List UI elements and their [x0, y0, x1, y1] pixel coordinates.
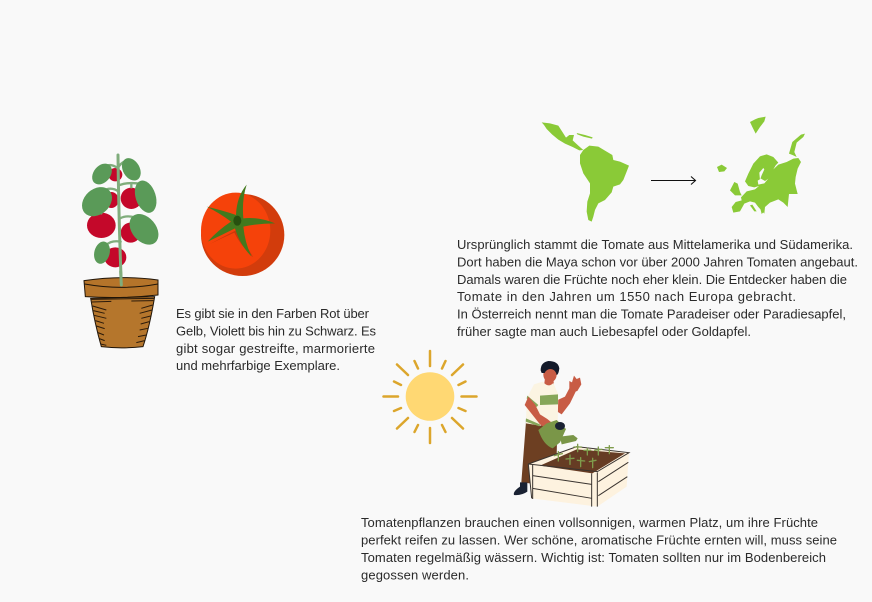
text: origin: In Österreich nennt man die Tomate Paradeiser oder Paradiesapfel, — [457, 307, 846, 322]
watering can — [538, 420, 578, 448]
raised arm — [557, 388, 576, 414]
text: care: Tomaten regelmäßig wässern. Wichtig ist: Tomaten sollten nur im Bodenbereich — [361, 550, 826, 565]
text: origin: Damals waren die Früchte noch eher klein. Die Entdecker haben die — [457, 272, 847, 287]
illustration: gardener watering a raised bed — [514, 361, 629, 507]
hand — [569, 376, 581, 392]
text: colours: Es gibt sie in den Farben Rot über — [176, 306, 370, 321]
raised bed — [528, 447, 629, 507]
shirt — [526, 382, 558, 426]
icon: tomato plant in pot — [76, 155, 164, 348]
neck — [544, 378, 554, 389]
text: origin: Tomate in den Jahren um 1550 nach Europa gebracht. — [457, 289, 796, 304]
lowered arm — [525, 397, 553, 429]
bed planks — [528, 447, 629, 507]
text: colours: und mehrfarbige Exemplare. — [176, 358, 340, 373]
map: Latin America — [542, 122, 629, 222]
arrow — [651, 176, 696, 184]
soil — [540, 449, 625, 473]
pot rim — [84, 278, 158, 298]
icon: tomato — [201, 185, 284, 276]
text: colours: gibt sogar gestreifte, marmorierte — [176, 341, 375, 356]
text: care — [361, 515, 837, 582]
text: origin: früher sagte man auch Liebesapfel oder Goldapfel. — [457, 324, 751, 339]
text: care: gegossen werden. — [361, 568, 469, 582]
stem and branches — [101, 155, 141, 285]
text: origin — [457, 237, 858, 339]
text: colours — [176, 306, 376, 373]
seedlings — [554, 444, 613, 468]
tomatoes on the plant — [87, 168, 142, 267]
leaves — [76, 155, 164, 266]
text: colours: Gelb, Violett bis hin zu Schwarz. Es — [176, 324, 376, 338]
calyx — [210, 230, 253, 257]
icon: sun — [384, 351, 476, 443]
text: origin: Dort haben die Maya schon vor über 2000 Jahren Tomaten angebaut. — [457, 254, 858, 269]
text: origin: Ursprünglich stammt die Tomate aus Mittelamerika und Südamerika. — [457, 237, 853, 252]
pot hatching — [91, 298, 154, 345]
map: Europe — [717, 117, 805, 214]
head — [543, 366, 557, 382]
text: care: Tomatenpflanzen brauchen einen vollsonnigen, warmen Platz, um ihre Früchte — [361, 515, 818, 530]
pot body — [91, 297, 155, 348]
trousers — [521, 422, 557, 483]
text: care: perfekt reifen zu lassen. Wer schöne, aromatische Früchte ernten will, muss seine — [361, 532, 837, 548]
shoe — [514, 482, 527, 495]
hair — [541, 361, 559, 375]
